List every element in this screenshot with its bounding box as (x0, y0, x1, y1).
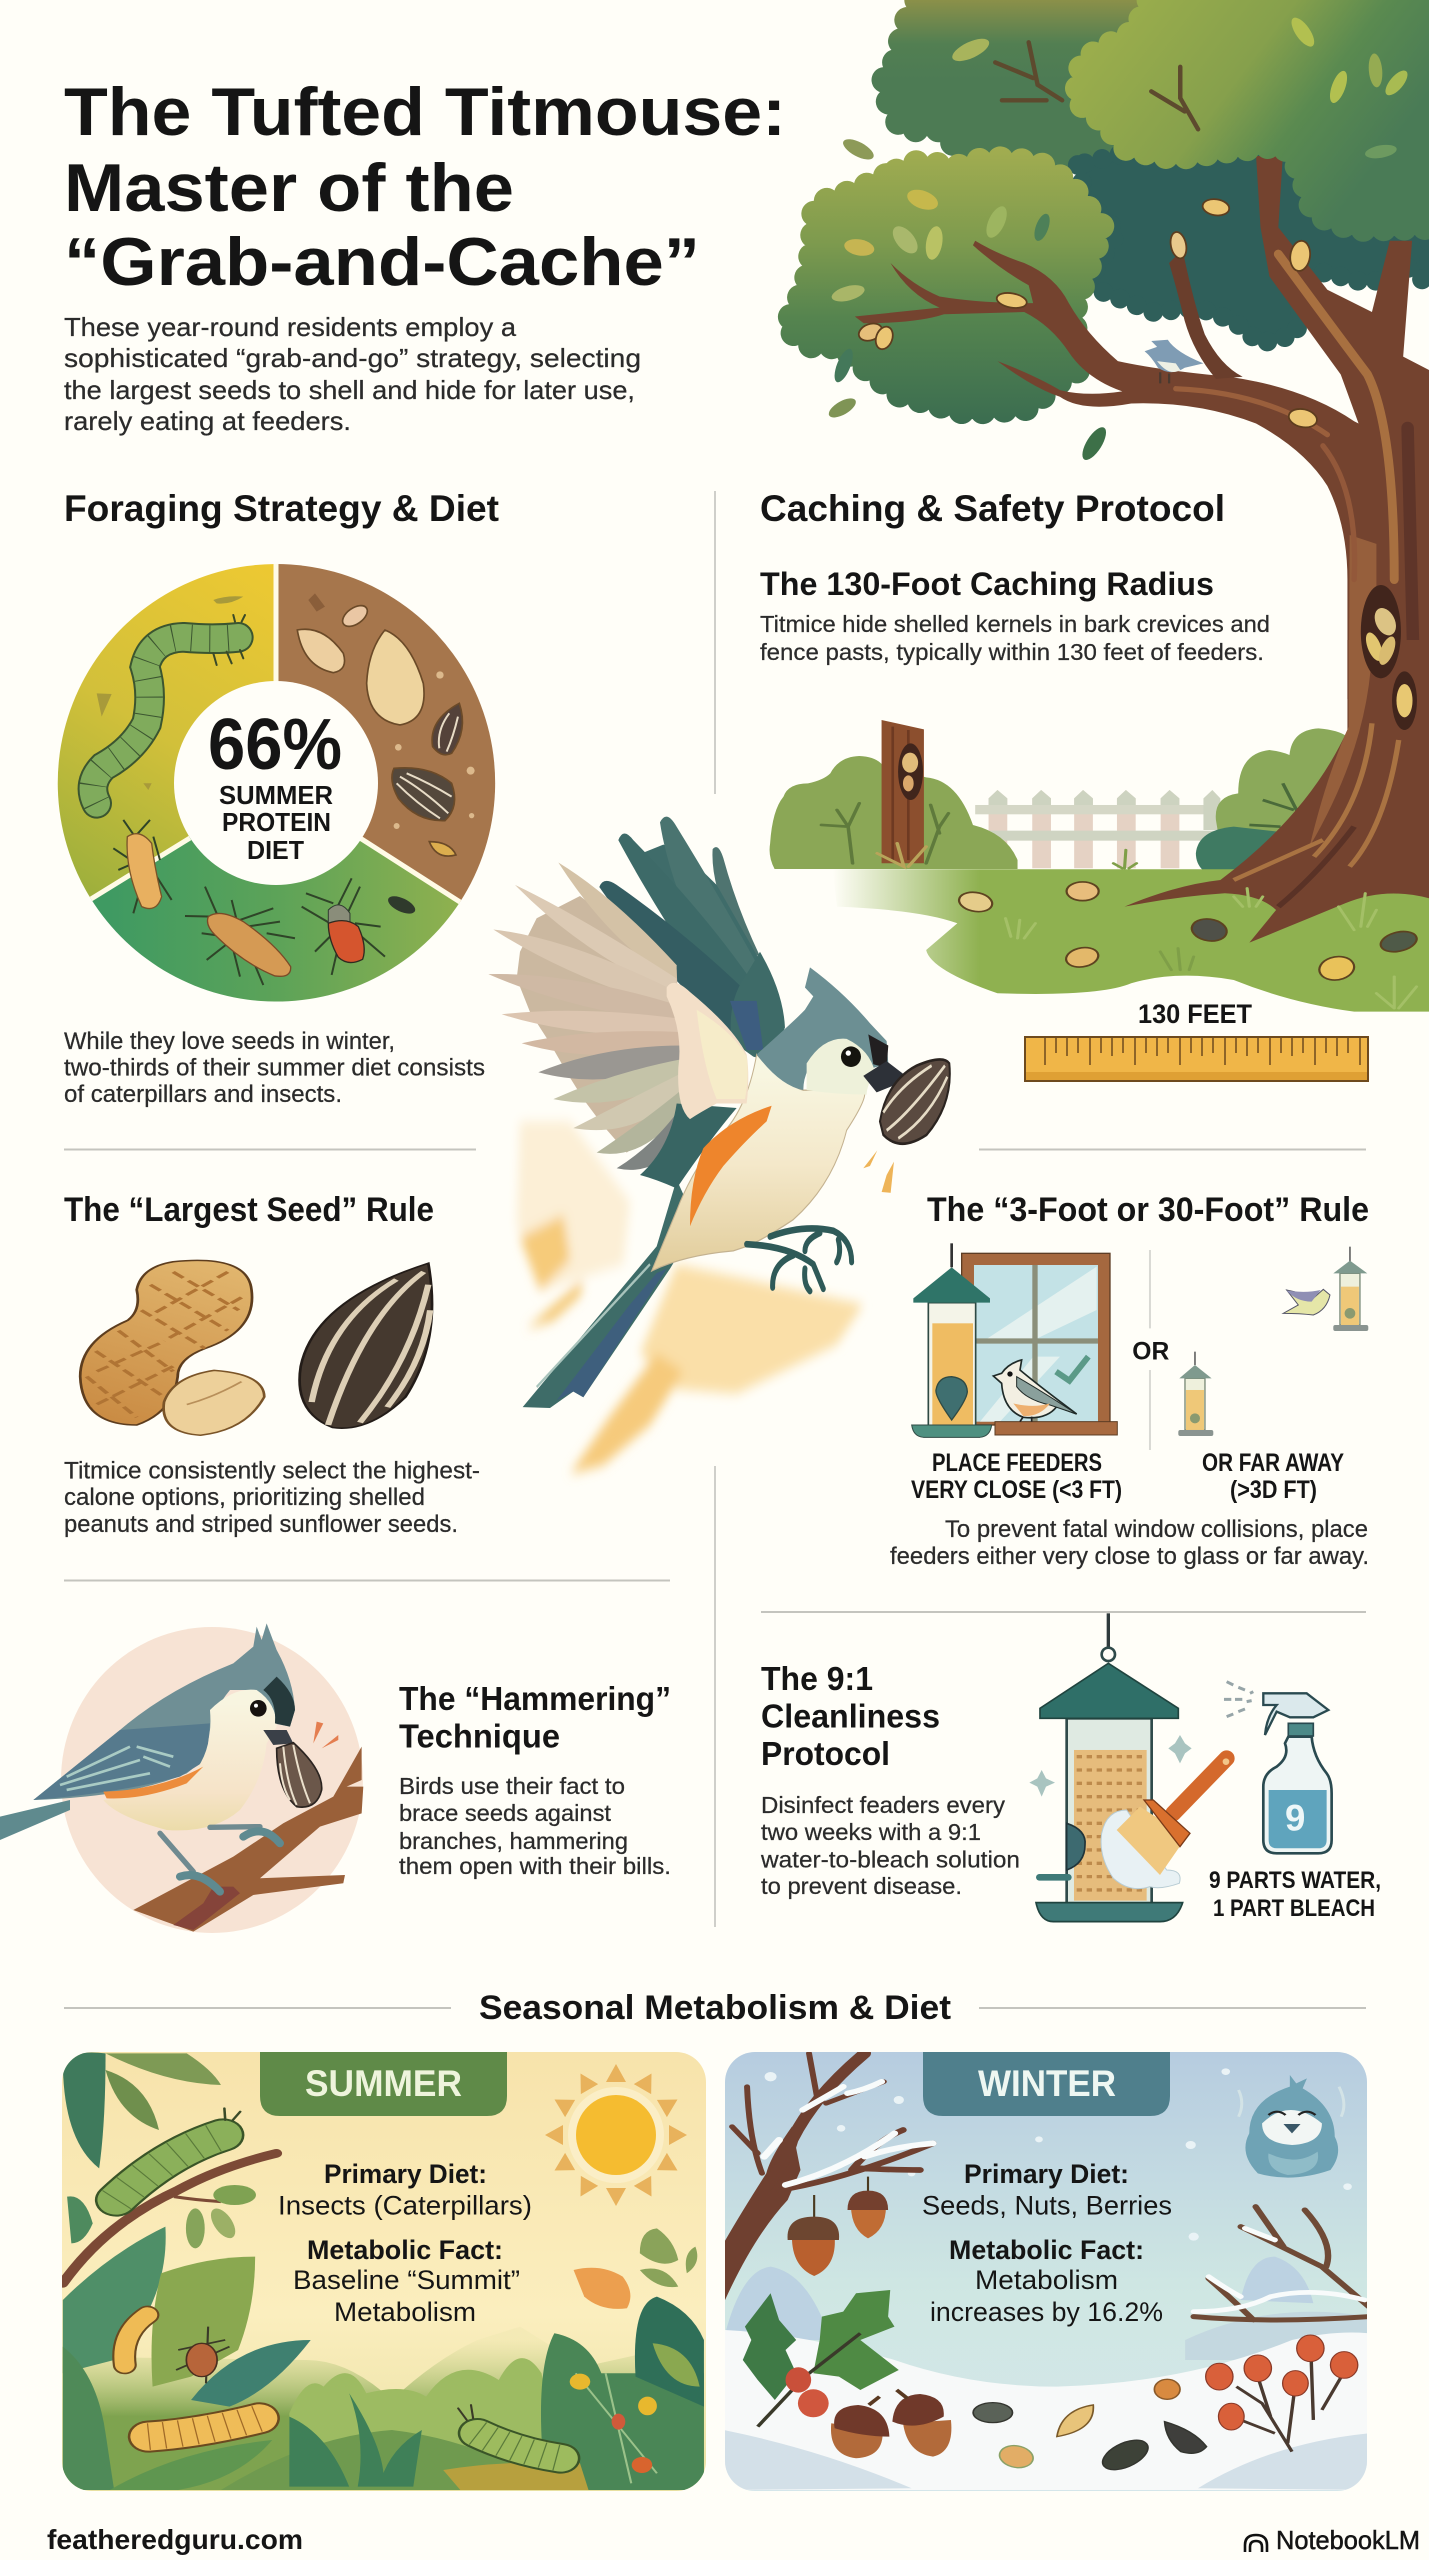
hammering technique text (399, 1680, 671, 1879)
canopy: top right crown (1075, 0, 1429, 230)
impact marks (313, 1722, 338, 1748)
grass tufts (1006, 850, 1417, 1008)
ruler labelled 130 feet: 130 FEET (1138, 999, 1252, 1029)
bird body (103, 1690, 277, 1830)
caching radius text block (760, 566, 1270, 665)
intro text: the largest seeds to shell and hide for later use, (64, 375, 635, 405)
diagram: feeder placement (912, 1243, 1368, 1450)
legs and feet (160, 1827, 280, 1892)
hanging acorns (788, 2177, 888, 2276)
summer facts: Primary Diet: (324, 2159, 487, 2189)
hammering technique text: Birds use their fact to (399, 1773, 625, 1799)
divider above or (1147, 1250, 1153, 1450)
summer facts (278, 2159, 532, 2327)
underwing shadow (640, 1104, 737, 1188)
caterpillar (93, 615, 245, 803)
beak (863, 1061, 910, 1092)
cached seeds in branches (856, 197, 1319, 430)
small leaf flecks (97, 596, 243, 790)
tail (523, 1179, 697, 1408)
trunk hollows with stashed seeds (1361, 585, 1417, 730)
canopy: dark teal interior (1078, 143, 1429, 343)
donut label (219, 780, 333, 865)
summer tab (260, 2052, 507, 2116)
illustration: scrubbing the feeder and bleach spray (1029, 1613, 1332, 1922)
text: window collisions (890, 1516, 1369, 1570)
caching radius text block: fence pasts, typically within 130 feet of feeders. (760, 639, 1264, 665)
title: The Tufted Titmouse: (64, 74, 786, 150)
ruler labelled 130 feet (1025, 999, 1368, 1081)
snow on branch (764, 2082, 933, 2185)
summer facts: Insects (Caterpillars) (278, 2190, 532, 2220)
snowdrifts (724, 2330, 1369, 2490)
ground patch (443, 2462, 589, 2490)
summer sun (545, 2064, 687, 2206)
yellow caterpillar (148, 2418, 259, 2437)
summer facts: Metabolic Fact: (307, 2235, 503, 2265)
heading: seasonal metabolism and diet: Seasonal Metabolism & Diet (479, 1989, 951, 2027)
summer tab: SUMMER (305, 2063, 462, 2104)
berries (570, 2374, 657, 2473)
forehead (263, 1677, 295, 1727)
forehead (868, 1034, 888, 1068)
face (807, 1039, 875, 1095)
cleanliness protocol text (760, 1660, 1020, 1899)
icon: check mark (1056, 1357, 1088, 1381)
donut label: PROTEIN (222, 807, 331, 837)
window frame (962, 1253, 1117, 1435)
tail (0, 1800, 70, 1840)
caching radius text block: The 130-Foot Caching Radius (760, 566, 1214, 602)
left leaves (62, 2196, 510, 2490)
winter background (725, 2052, 1367, 2491)
bleach ratio label: 1 PART BLEACH (1213, 1895, 1375, 1922)
summer facts: Baseline “Summit” (293, 2265, 520, 2295)
winter tab (923, 2052, 1170, 2116)
illustration: fenced garden with scattered seeds (770, 585, 1429, 1012)
hammering technique text: them open with their bills. (399, 1853, 671, 1879)
cleanliness protocol text: Disinfect feaders every (761, 1792, 1006, 1818)
text: largest seed: peanuts and striped sunflower seeds. (64, 1511, 458, 1538)
illustration: oak tree with cached seeds (786, 0, 1429, 699)
fence (975, 790, 1220, 868)
distant hills (724, 2257, 1313, 2340)
holly (743, 2290, 899, 2427)
title: “Grab-and-Cache” (64, 224, 700, 300)
text: window collisions: To prevent fatal window collisions, place (945, 1516, 1368, 1543)
orange leaf (574, 2268, 630, 2309)
middle limb (1169, 250, 1243, 379)
branch with leaves (63, 2153, 277, 2283)
back and crest (33, 1623, 295, 1800)
lawn (833, 869, 1429, 1012)
heading: 3-foot or 30-foot rule: The “3-Foot or 30-Foot” Rule (927, 1191, 1369, 1229)
segment: insects (91, 783, 460, 1002)
spray bottle (1224, 1682, 1332, 1853)
right twig with snow (1194, 2207, 1369, 2320)
icon: far feeder with bird (1283, 1247, 1368, 1331)
intro text (64, 312, 641, 436)
tan flight feathers (488, 862, 697, 1170)
cleanliness protocol text: water-to-bleach solution (760, 1846, 1020, 1872)
heading: caching and safety protocol: Caching & Safety Protocol (760, 488, 1225, 529)
peach circle backdrop (61, 1627, 363, 1933)
intro text: These year-round residents employ a (64, 312, 517, 342)
tree trunk and main branches (855, 156, 1429, 699)
winter facts: increases by 16.2% (930, 2297, 1163, 2327)
winter facts: Primary Diet: (964, 2159, 1129, 2189)
motion burst (517, 1121, 863, 1474)
placement labels (911, 1449, 1344, 1504)
segment: caterpillars (58, 564, 276, 899)
head and crest (757, 967, 888, 1090)
branch (133, 1747, 363, 1932)
text: largest seed: calone options, prioritizing shelled (64, 1484, 425, 1511)
winter berries (1206, 2335, 1358, 2452)
text: largest seed (64, 1458, 480, 1538)
snowflakes (765, 2068, 1352, 2241)
placement labels: (>3D FT) (1230, 1476, 1317, 1504)
canopy twigs (995, 42, 1198, 129)
intro text: sophisticated “grab-and-go” strategy, selecting (64, 343, 641, 373)
bird body (652, 1054, 865, 1271)
seed crumbs (863, 1150, 894, 1193)
wing coverts (667, 983, 748, 1119)
stat: 66 percent: 66% (208, 705, 342, 785)
winter tab: WINTER (978, 2063, 1116, 2104)
footer: source website: featheredguru.com (47, 2524, 303, 2555)
icon: striped sunflower seed (300, 1263, 432, 1428)
icon: notebooklm arcs (1245, 2535, 1267, 2552)
sparkles (1029, 1735, 1192, 1797)
canopy leaves (830, 14, 1411, 305)
heading: largest seed rule: The “Largest Seed” Rule (64, 1191, 434, 1229)
icons: peanut and sunflower seed (80, 1260, 432, 1435)
footer: notebooklm badge: NotebookLM (1276, 2525, 1420, 2555)
placement labels: VERY CLOSE (<3 FT) (911, 1476, 1122, 1504)
panel: summer (62, 2052, 706, 2491)
text: summer diet: two-thirds of their summer diet consists (64, 1054, 485, 1082)
seed flecks (308, 593, 325, 612)
top leaves (63, 2052, 221, 2168)
eye (250, 1700, 267, 1717)
summer background (62, 2052, 706, 2491)
text: summer diet: While they love seeds in winter, (64, 1028, 395, 1055)
icon: far feeder near (1178, 1352, 1213, 1436)
winter facts: Metabolic Fact: (949, 2235, 1144, 2265)
icon: close feeder (912, 1243, 992, 1437)
hammering technique text: branches, hammering (399, 1828, 628, 1854)
cleanliness protocol text: two weeks with a 9:1 (761, 1819, 981, 1845)
background shrubs (289, 2358, 542, 2463)
small black beetle (386, 893, 418, 917)
grub insect (113, 820, 172, 913)
icon: peanut (80, 1260, 264, 1435)
title: Master of the (64, 150, 514, 226)
orange flank (690, 1106, 772, 1226)
cleanliness protocol text: to prevent disease. (761, 1873, 962, 1899)
seeds on snow (973, 2379, 1207, 2476)
acorns on snow (831, 2390, 951, 2458)
bare branch (724, 2053, 933, 2303)
sunflower seed in beak (880, 1059, 950, 1144)
orange flank (103, 1767, 203, 1798)
intro text: rarely eating at feeders. (64, 406, 351, 436)
summer foliage and insects (63, 2052, 704, 2490)
mealworm insect (185, 887, 295, 985)
cleanliness protocol text: The 9:1 (761, 1660, 873, 1697)
canopy: upper left (884, 0, 1243, 169)
bark highlights (1176, 254, 1414, 699)
seeds on ground (956, 882, 1421, 984)
illustration: titmouse in flight carrying seed (488, 817, 950, 1474)
donut center (174, 681, 378, 885)
eye (841, 1046, 861, 1067)
red beetle (302, 878, 385, 975)
placement labels: PLACE FEEDERS (932, 1449, 1102, 1477)
green caterpillar (458, 2405, 561, 2458)
bush twigs and grass (821, 803, 948, 867)
summer facts: Metabolism (334, 2297, 476, 2327)
sunflower seed (277, 1743, 322, 1807)
title (64, 74, 786, 300)
beak (263, 1730, 293, 1745)
canopy: left olive crown (786, 158, 1102, 412)
wing feathers (33, 1723, 210, 1800)
panel: winter (724, 2052, 1369, 2491)
donut chart: summer protein diet (58, 564, 495, 1002)
hammering technique text: The “Hammering” (399, 1680, 671, 1717)
heading: foraging strategy and diet: Foraging Strategy & Diet (64, 488, 499, 529)
donut illustrations (93, 593, 475, 985)
yellow grub (124, 2315, 147, 2365)
segment: seeds (276, 564, 495, 902)
illustration: titmouse hammering seed on branch (0, 1623, 363, 1933)
caterpillar on branch (116, 2108, 240, 2200)
caching radius text block: Titmice hide shelled kernels in bark crevices and (760, 611, 1270, 637)
winter facts (922, 2159, 1172, 2327)
donut label: SUMMER (219, 780, 333, 810)
trunk base and roots (1125, 640, 1429, 943)
winter facts: Metabolism (975, 2265, 1118, 2295)
cleanliness protocol text: Cleanliness (761, 1698, 940, 1734)
wooden post with hidden seeds (882, 720, 924, 863)
donut label: DIET (247, 835, 304, 865)
striped beetle (176, 2327, 230, 2383)
chilly puffed bird (1239, 2075, 1344, 2178)
bush right (1196, 728, 1347, 870)
hammering technique text: Technique (399, 1718, 560, 1754)
cleanliness protocol text: Protocol (761, 1735, 890, 1772)
feeder (1036, 1613, 1183, 1922)
label: or: OR (1132, 1337, 1169, 1365)
bottle number: 9 (1285, 1798, 1305, 1839)
small bird perched on branch (1145, 340, 1203, 383)
text: window collisions: feeders either very close to glass or far away. (890, 1543, 1369, 1570)
winter facts: Seeds, Nuts, Berries (922, 2190, 1172, 2220)
text: summer diet: of caterpillars and insects. (64, 1081, 342, 1108)
falling leaves (826, 135, 1111, 463)
bleach ratio label (1209, 1867, 1381, 1922)
foam (1101, 1810, 1180, 1889)
text: largest seed: Titmice consistently select the highest- (64, 1458, 480, 1484)
placement labels: OR FAR AWAY (1202, 1449, 1344, 1477)
icon: small titmouse on sill (993, 1360, 1077, 1422)
bush left (770, 756, 1018, 869)
seeds (297, 601, 462, 856)
bleach ratio label: 9 PARTS WATER, (1209, 1867, 1381, 1894)
hammering technique text: brace seeds against (399, 1800, 612, 1826)
right foliage (541, 2228, 704, 2490)
legs and claws (747, 1228, 852, 1291)
winter scene (724, 2053, 1369, 2490)
upper dark wing feathers (599, 817, 785, 1058)
text: summer diet (64, 1028, 485, 1108)
scrub brush (1117, 1758, 1229, 1875)
lower foliage wash (62, 2345, 704, 2490)
